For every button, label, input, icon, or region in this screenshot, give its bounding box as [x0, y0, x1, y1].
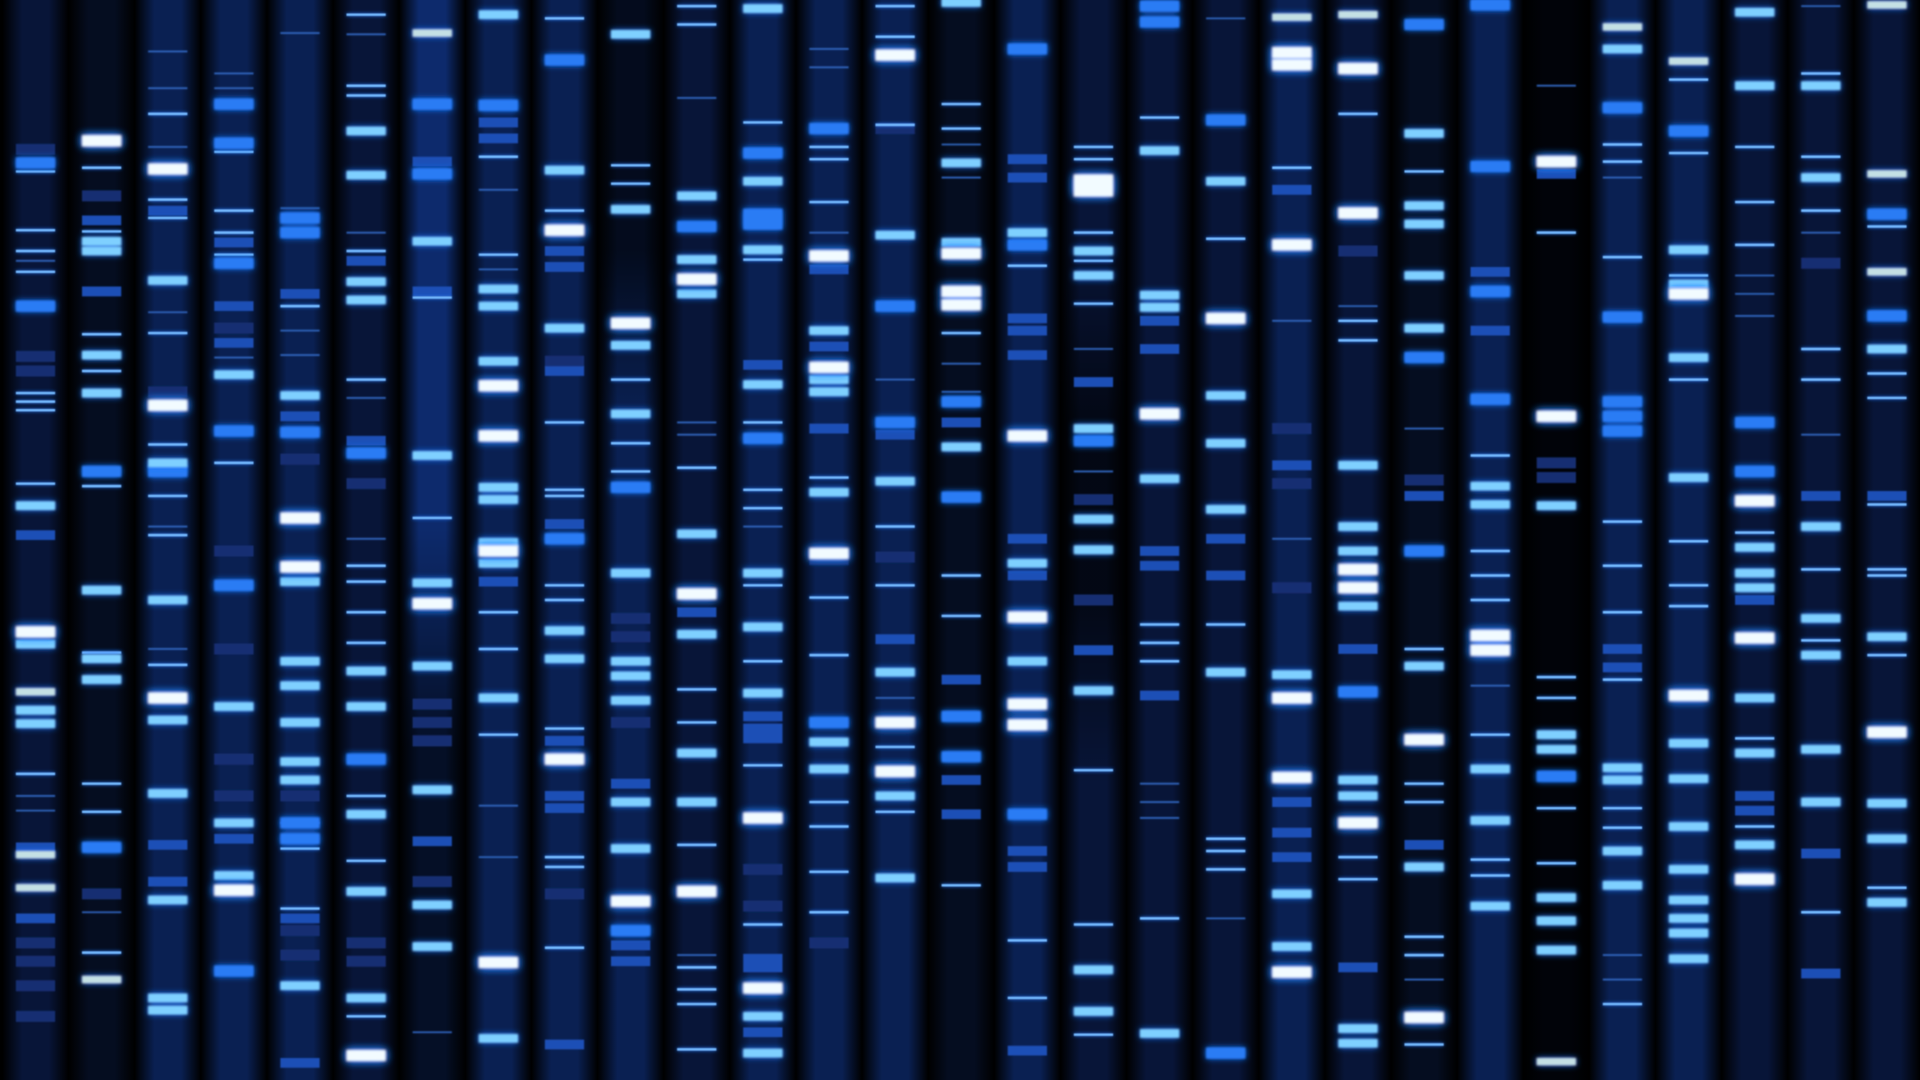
lane 26: [1656, 0, 1722, 1080]
lane 23: [1457, 0, 1523, 1080]
lane 21: [1325, 0, 1391, 1080]
lane 2: [69, 0, 135, 1080]
lane 13: [796, 0, 862, 1080]
lane 14: [862, 0, 928, 1080]
lane 11: [664, 0, 730, 1080]
lane 16: [994, 0, 1060, 1080]
lane 17: [1060, 0, 1127, 1080]
lane 7: [399, 0, 465, 1080]
lane 29: [1854, 0, 1920, 1080]
lane 12: [730, 0, 796, 1080]
lane 9: [531, 0, 598, 1080]
lane 19: [1193, 0, 1259, 1080]
lane 8: [465, 0, 531, 1080]
lane 10: [598, 0, 664, 1080]
lane 28: [1788, 0, 1854, 1080]
lane 20: [1259, 0, 1325, 1080]
lane 3: [135, 0, 201, 1080]
lane 1: [2, 0, 69, 1080]
lane 18: [1127, 0, 1193, 1080]
lane 22: [1391, 0, 1457, 1080]
lane 27: [1722, 0, 1788, 1080]
lane 24: [1523, 0, 1589, 1080]
lane 15: [928, 0, 994, 1080]
lane 25: [1589, 0, 1656, 1080]
lane 6: [333, 0, 399, 1080]
lane 5: [267, 0, 333, 1080]
lane 4: [201, 0, 267, 1080]
